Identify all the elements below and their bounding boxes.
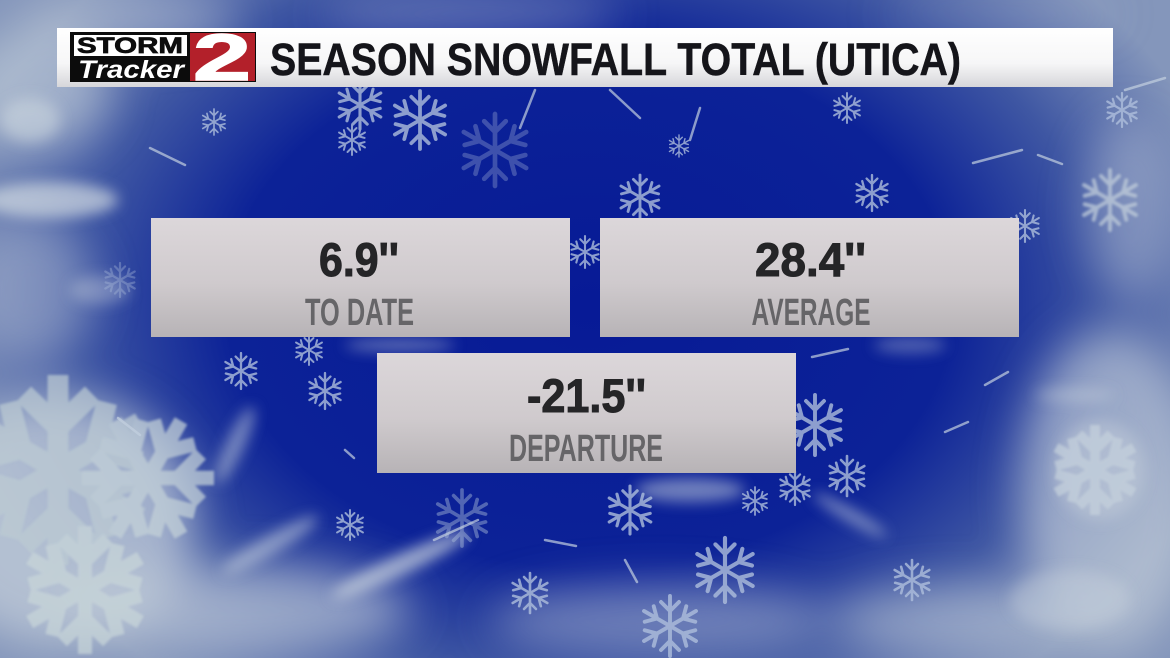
panel: to date (151, 218, 570, 337)
logo: Storm Tracker 2: STORM (77, 33, 183, 58)
logo: Storm Tracker 2: 2 (193, 20, 251, 94)
logo: Storm Tracker 2 (70, 20, 256, 94)
label: departure: DEPARTURE (509, 428, 663, 470)
panel: average (600, 218, 1019, 337)
label: average: AVERAGE (752, 292, 870, 334)
label: to date: TO DATE (305, 292, 414, 334)
header bar (57, 20, 1113, 94)
snowflakes: large soft (0, 170, 1142, 654)
logo: Storm Tracker 2: Tracker (78, 56, 185, 84)
snow streaks (118, 78, 1165, 582)
value: average: 28.4'' (755, 233, 866, 286)
value: to date: 6.9'' (319, 233, 399, 286)
title: SEASON SNOWFALL TOTAL (UTICA) (270, 34, 961, 85)
value: departure: -21.5'' (527, 369, 646, 422)
panel: departure (377, 353, 796, 473)
snowflakes: small crisp (103, 81, 1139, 656)
